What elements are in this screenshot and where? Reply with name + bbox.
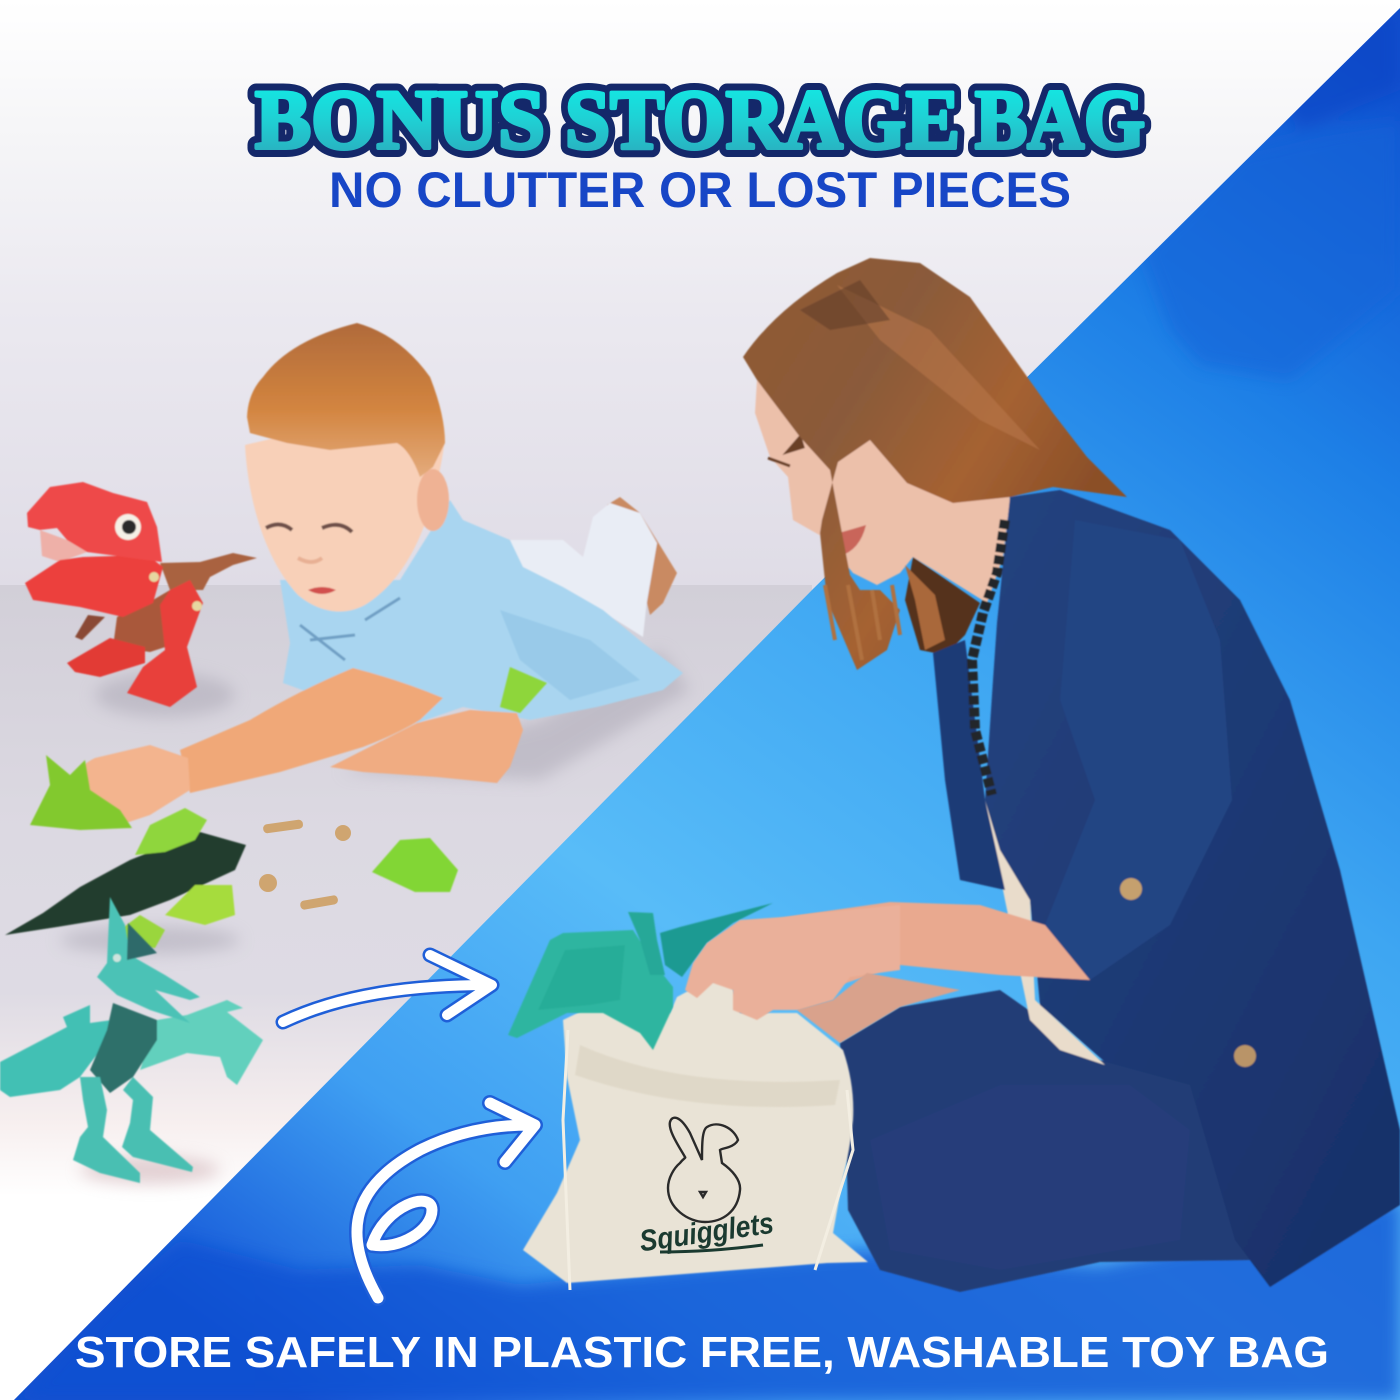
boy foot [607,497,677,615]
woman neck and face [755,370,1010,603]
left leg [73,1077,140,1183]
toy: teal pterodactyl in bag [508,903,773,1050]
left wing [0,1005,112,1097]
woman necklace [972,520,1005,795]
title outline: STORAGE [565,73,960,167]
title outline: BONUS [255,73,545,167]
toy: dark green dinosaur [5,808,246,948]
bottom caption: STORE SAFELY IN PLASTIC FREE, WASHABLE TOY BAG [75,1328,1329,1377]
claw [628,912,665,975]
woman dark hair behind neck [905,557,980,655]
body [90,1003,157,1093]
woman sleeve button [1120,878,1142,900]
bag drawstrings [563,1030,853,1290]
arrow: pterodactyl to bag [283,955,492,1022]
woman hand on bag [685,905,900,1020]
toy: red t-rex [25,482,257,707]
wing inner [538,945,625,1010]
lower jaw [25,555,163,617]
tail [160,553,257,590]
head [97,897,200,1023]
woman blazer button [1234,1045,1256,1067]
right leg [122,1077,193,1172]
boy hand left [72,745,190,825]
bolts [149,572,159,582]
title fill: BONUS [255,73,545,167]
bag body [523,980,868,1283]
head [660,903,773,977]
left foot [67,638,145,677]
boy right arm and hand [330,710,523,783]
woman left lapel [933,640,1005,890]
boy collar [300,598,400,660]
boy legs [503,503,657,637]
photo: woman [740,258,1400,1292]
boy hair [247,323,445,477]
storage bag [523,980,868,1290]
boy shirt [280,500,683,723]
subtitle: NO CLUTTER OR LOST PIECES [329,162,1071,218]
eye [115,514,141,540]
bag fold [575,1045,840,1107]
title fill: BAG [975,73,1145,167]
right wing [140,1000,263,1085]
arrow: curl into bag [357,1103,535,1298]
dark crest [127,923,157,960]
woman hair [743,258,1127,670]
watercolor patches bottom [14,1200,1400,1400]
thigh and right foot [127,580,203,707]
title [255,73,1145,167]
woman pants [840,990,1250,1292]
toy: green leaf piece [372,838,458,892]
woman hair strands [905,565,945,650]
title outline: BAG [975,73,1145,167]
woman forearm [740,902,1090,985]
body [113,590,187,652]
bag brand underline [660,1245,763,1252]
toy: green leaf in boy hand [500,667,547,713]
watercolor patches top right [1140,10,1400,380]
bag brand name: Squigglets [638,1207,776,1258]
boy head [245,420,445,612]
upper head [27,482,162,562]
small arm [75,615,105,640]
boy eyes, nose and mouth [266,524,352,532]
title outline [255,73,1145,167]
bag rabbit logo [668,1118,740,1222]
title fill [255,73,1145,167]
floor shadows [60,650,690,1184]
woman brow, eye, mouth [768,437,803,466]
mouth [40,530,87,562]
boy arm reaching [180,668,443,793]
woman blazer [985,490,1400,1287]
eye [113,954,121,962]
woman shirt [985,800,1105,1065]
wing [508,930,673,1050]
background: floor [0,585,812,1400]
toy: teal pterodactyl [0,897,263,1183]
toy: screws [259,819,351,910]
woman lower arm behind bag [797,973,960,1043]
toy: green plant piece under hand [30,755,132,830]
photo: boy lying on floor [72,323,683,825]
woman sleeve [1045,520,1232,980]
title fill: STORAGE [565,73,960,167]
